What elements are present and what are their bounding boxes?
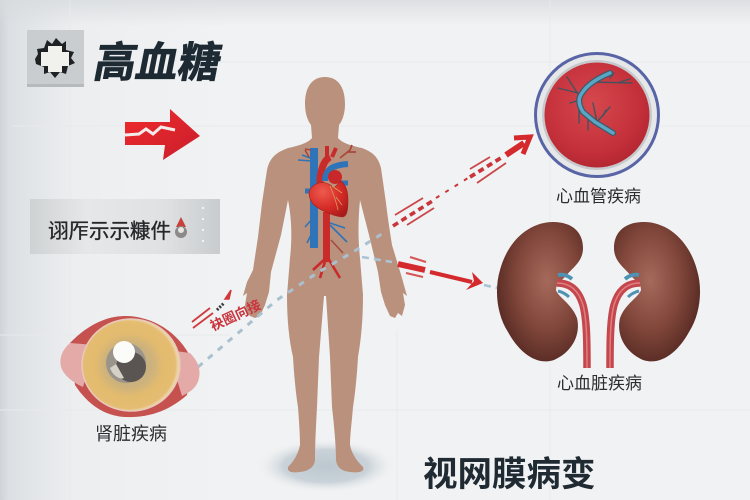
arrow: to heart disease <box>393 137 530 226</box>
body silhouette <box>243 77 407 472</box>
veins <box>298 148 348 248</box>
shadow <box>256 439 396 493</box>
human body <box>243 77 407 493</box>
tube right <box>610 275 640 368</box>
label text: 诩厏示示糠件 <box>48 219 171 243</box>
blue arch <box>325 164 348 181</box>
circulatory system <box>298 145 356 278</box>
label: kidney caption: 心血脏疾病 <box>557 374 642 393</box>
atrium <box>328 170 342 184</box>
arrow: to kidney disease <box>398 257 483 290</box>
dashed link: blue to eye <box>198 232 385 367</box>
arrow: high glucose <box>125 109 200 160</box>
title: 高血糖 <box>90 39 225 86</box>
kidney right <box>614 222 700 361</box>
vessel branches <box>558 73 632 133</box>
icon: eye <box>60 316 200 417</box>
label: heart caption: 心血管疾病 <box>556 187 641 206</box>
bottom heading: 视网膜病变 <box>423 456 596 494</box>
panel: grey label <box>30 199 220 254</box>
icon: warning badge <box>27 30 84 87</box>
icon: small gnome <box>175 217 187 238</box>
arteries <box>305 145 356 278</box>
label: eye caption: 肾脏疾病 <box>95 424 167 444</box>
arrow: to eye <box>192 290 231 328</box>
small red label: 袂圈向接 <box>208 296 264 334</box>
heart <box>309 181 348 217</box>
kidney left <box>497 222 583 361</box>
kidneys <box>497 222 700 368</box>
heart disease circle <box>536 54 658 176</box>
tube left <box>557 275 587 368</box>
dashed link: blue to kidney <box>362 257 497 288</box>
